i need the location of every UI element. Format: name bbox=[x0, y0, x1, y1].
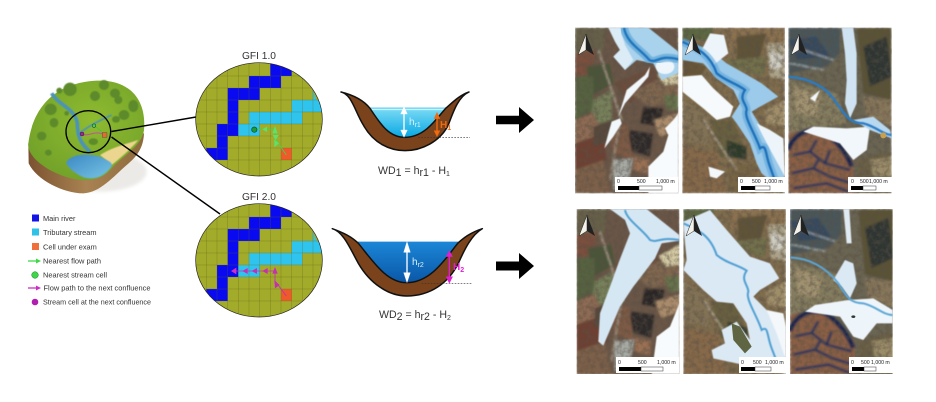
scale bar: top right: 1,000 m bbox=[869, 179, 888, 185]
formula WD1: r1 bbox=[420, 167, 429, 179]
formula WD2: 2 bbox=[447, 315, 451, 322]
north arrow: bottom right bbox=[793, 215, 809, 236]
north arrow: top left bbox=[578, 34, 594, 55]
formula WD2: 2 bbox=[397, 311, 403, 323]
scale bar: bottom center: 0 bbox=[741, 360, 744, 366]
legend: main river: Main river bbox=[43, 214, 76, 223]
scale bar: bottom right: 0 bbox=[851, 360, 854, 366]
scale bar: top right bbox=[848, 177, 892, 192]
streams bbox=[52, 93, 90, 152]
formula WD1: 1 bbox=[396, 167, 402, 179]
depth arrow hr1 bbox=[401, 107, 407, 137]
formula WD1: 1 bbox=[446, 171, 450, 178]
arrow to top maps bbox=[496, 107, 534, 133]
scale bar: top right: 500 bbox=[860, 179, 869, 185]
map: bottom left bbox=[576, 209, 680, 375]
lens path markers bbox=[82, 133, 105, 135]
heading: GFI 1.0: GFI 1.0 bbox=[242, 51, 276, 62]
map: bottom center bbox=[683, 209, 786, 375]
scale bar: bottom center: 500 bbox=[753, 360, 762, 366]
grid: GFI 1.0 bbox=[195, 60, 325, 177]
top map row bbox=[575, 28, 892, 193]
legend: flow path to next confluence: Flow path to the next confluence bbox=[44, 284, 150, 292]
lens circle bbox=[66, 111, 111, 153]
channel cross-section 2 bbox=[332, 229, 482, 296]
trees bbox=[37, 80, 138, 156]
formula WD2: r2 bbox=[421, 311, 430, 323]
height arrow H1 bbox=[434, 112, 440, 137]
label H1: 1 bbox=[447, 125, 451, 132]
north arrow: top center bbox=[685, 34, 701, 55]
island illustration bbox=[28, 80, 147, 193]
label hr1: h bbox=[409, 117, 415, 128]
label hr2: r2 bbox=[418, 262, 424, 269]
scale bar: top left: 1,000 m bbox=[656, 179, 675, 185]
scale bar: bottom right: 1,000 m bbox=[871, 360, 890, 366]
scale bar: top center: 500 bbox=[752, 179, 761, 185]
scale bar: bottom left: 500 bbox=[638, 360, 647, 366]
north arrow: bottom left bbox=[579, 215, 595, 236]
legend: nearest flow path: Nearest flow path bbox=[43, 256, 101, 266]
legend bbox=[28, 214, 151, 306]
sand bbox=[100, 140, 138, 165]
scale bar: bottom right: 500 bbox=[861, 360, 870, 366]
scale bar: top left: 500 bbox=[637, 179, 646, 185]
depth arrow hr2 bbox=[404, 242, 410, 283]
legend: stream cell at next confluence: Stream cell at the next confluence bbox=[43, 298, 151, 306]
north arrow: bottom center bbox=[686, 215, 702, 236]
label H2: H bbox=[453, 262, 460, 273]
formula WD1: - H bbox=[429, 165, 446, 177]
scale bar: bottom right bbox=[849, 357, 893, 373]
north arrows and scale bars bbox=[578, 34, 893, 373]
formula WD1: = h bbox=[402, 165, 420, 177]
legend: tributary stream: Tributary stream bbox=[43, 228, 97, 237]
scale bar: bottom left: 1,000 m bbox=[657, 360, 676, 366]
legend: nearest stream cell: Nearest stream cell bbox=[43, 270, 107, 280]
channel cross-section 1 bbox=[341, 92, 470, 151]
heading: GFI 2.0: GFI 2.0 bbox=[242, 192, 276, 203]
label hr1: r1 bbox=[415, 122, 421, 129]
north arrow: top right bbox=[791, 34, 807, 55]
connector line to GFI 1.0 bbox=[112, 117, 196, 132]
confluence flow path arrows bbox=[231, 267, 286, 296]
label H2: 2 bbox=[460, 267, 464, 274]
formula WD2: WD bbox=[379, 309, 397, 321]
scale bar: bottom center bbox=[739, 357, 786, 373]
scale bar: top left bbox=[615, 177, 678, 192]
label hr2: h bbox=[412, 257, 418, 268]
grid: GFI 2.0 bbox=[195, 201, 325, 318]
formula WD1: WD bbox=[378, 165, 396, 177]
scale bar: top left: 0 bbox=[617, 179, 620, 185]
scale bar: bottom left: 0 bbox=[618, 360, 621, 366]
bottom map row bbox=[576, 209, 893, 375]
map: bottom right bbox=[790, 209, 893, 375]
scale bar: top center: 0 bbox=[740, 179, 743, 185]
legend: cell under exam: Cell under exam bbox=[43, 242, 97, 252]
formula WD2: = h bbox=[403, 309, 421, 321]
map: top center bbox=[682, 28, 785, 193]
lake bbox=[66, 155, 112, 178]
label H1: H bbox=[440, 120, 447, 131]
scale bar: bottom center: 1,000 m bbox=[765, 360, 784, 366]
arrow to bottom maps bbox=[496, 253, 534, 279]
scale bar: top right: 0 bbox=[851, 179, 854, 185]
scale bar: top center bbox=[738, 177, 785, 192]
formula WD2: - H bbox=[430, 309, 447, 321]
scale bar: top center: 1,000 m bbox=[764, 179, 783, 185]
height arrow H2 bbox=[446, 251, 453, 283]
connector line to GFI 2.0 bbox=[112, 137, 220, 214]
map: top right bbox=[788, 28, 892, 193]
nearest flow path arrows bbox=[252, 126, 286, 155]
map: top left bbox=[575, 28, 678, 193]
scale bar: bottom left bbox=[616, 357, 679, 373]
